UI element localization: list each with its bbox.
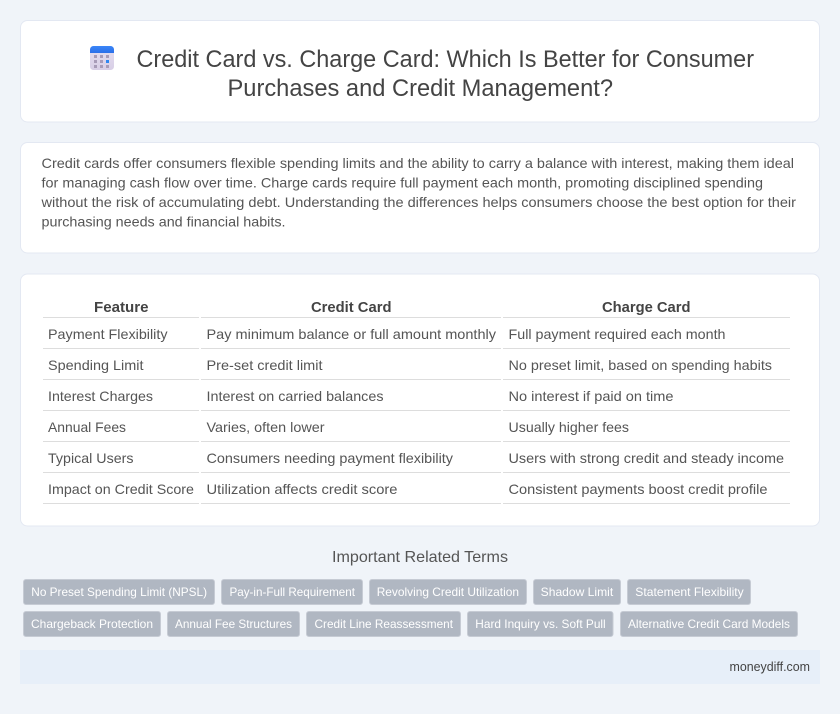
row: impact on credit score: Utilization affects credit score <box>206 481 398 497</box>
row: typical users <box>48 450 784 466</box>
row: interest charges: No interest if paid on time <box>508 388 674 404</box>
row: payment flexibility <box>48 326 726 342</box>
table header row: Feature <box>94 300 148 316</box>
row: interest charges <box>48 388 674 404</box>
row: annual fees: Usually higher fees <box>508 419 629 435</box>
heading: important related terms: Important Related Terms <box>332 549 508 566</box>
tag: No Preset Spending Limit (NPSL) <box>31 585 207 599</box>
row: payment flexibility: Pay minimum balance or full amount monthly <box>206 326 496 342</box>
footer bar <box>20 650 820 684</box>
row: payment flexibility: Full payment required each month <box>508 326 726 342</box>
row: spending limit: Spending Limit <box>48 357 144 373</box>
summary paragraph: for managing cash flow over time. Charge cards require full payment each month, promoting disciplined spending <box>42 174 763 190</box>
footer site name: moneydiff.com <box>730 660 810 674</box>
tag <box>370 580 526 604</box>
tag <box>620 612 798 636</box>
row: interest charges: Interest Charges <box>48 388 153 404</box>
summary paragraph: without the risk of accumulating debt. Understanding the differences helps consumers choose the best option for their <box>40 194 796 210</box>
related terms tags <box>24 580 798 636</box>
table header row <box>94 300 690 316</box>
row: impact on credit score <box>48 481 768 497</box>
tag: Revolving Credit Utilization <box>377 585 519 599</box>
summary paragraph: purchasing needs and financial habits. <box>42 214 286 230</box>
tag: Annual Fee Structures <box>175 617 292 631</box>
row: spending limit: No preset limit, based on spending habits <box>508 357 772 373</box>
tag: Alternative Credit Card Models <box>628 617 790 631</box>
row: payment flexibility: Payment Flexibility <box>48 326 168 342</box>
panel: header <box>20 20 820 122</box>
row: spending limit <box>48 357 772 373</box>
tag <box>222 580 362 604</box>
summary paragraph <box>40 155 796 230</box>
row: typical users: Typical Users <box>48 450 134 466</box>
title <box>136 46 754 102</box>
row: interest charges: Interest on carried balances <box>206 388 384 404</box>
panel: summary text <box>20 142 820 253</box>
title: Purchases and Credit Management? <box>228 75 613 102</box>
tag: Credit Line Reassessment <box>314 617 454 631</box>
panel: comparison table <box>20 274 820 526</box>
row: typical users: Users with strong credit and steady income <box>508 450 784 466</box>
tag: Statement Flexibility <box>635 585 744 599</box>
title: Credit Card vs. Charge Card: Which Is Better for Consumer <box>136 46 754 73</box>
row: impact on credit score: Consistent payments boost credit profile <box>508 481 768 497</box>
tag: Hard Inquiry vs. Soft Pull <box>475 617 606 631</box>
tag <box>468 612 613 636</box>
tag: Pay-in-Full Requirement <box>230 585 356 599</box>
row: annual fees: Annual Fees <box>48 419 126 435</box>
tag <box>24 612 160 636</box>
tag <box>628 580 750 604</box>
row: typical users: Consumers needing payment flexibility <box>206 450 453 466</box>
tag: Chargeback Protection <box>31 617 153 631</box>
summary paragraph: Credit cards offer consumers flexible spending limits and the ability to carry a balance with interest, making them ideal <box>42 155 794 171</box>
row: annual fees: Varies, often lower <box>206 419 325 435</box>
icon: calendar <box>90 46 114 70</box>
row: annual fees <box>48 419 629 435</box>
tag <box>534 580 620 604</box>
table header row: Credit Card <box>311 300 392 316</box>
tag <box>24 580 214 604</box>
tag <box>306 612 460 636</box>
table header row: Charge Card <box>602 300 690 316</box>
tag: Shadow Limit <box>541 585 614 599</box>
row: spending limit: Pre-set credit limit <box>206 357 323 373</box>
row: impact on credit score: Impact on Credit Score <box>48 481 194 497</box>
tag <box>168 612 300 636</box>
